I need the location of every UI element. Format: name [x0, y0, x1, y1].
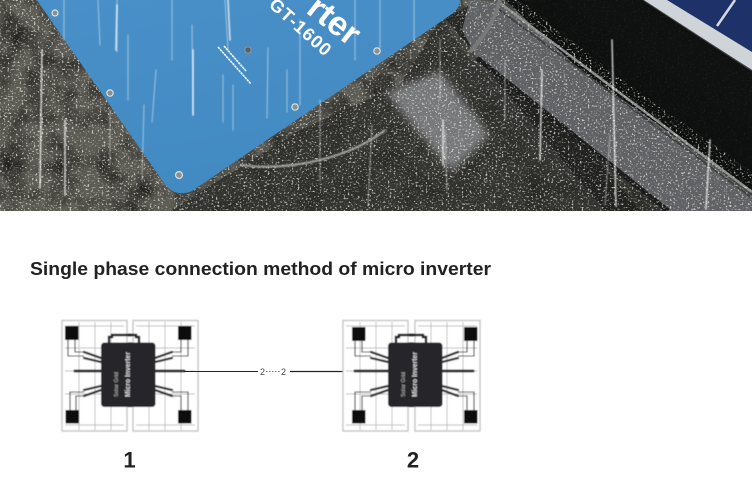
break label: 2 [260, 367, 265, 377]
diagram 1: inverter with two solar panels [62, 320, 198, 431]
cable [470, 0, 500, 52]
black recess [505, 0, 752, 190]
speckle [0, 0, 752, 211]
inverter body [388, 342, 442, 407]
ground base [0, 0, 752, 211]
connectors [355, 352, 473, 396]
panels frame [343, 320, 480, 431]
panels frame [62, 320, 198, 431]
junction boxes [65, 326, 192, 424]
connectors [75, 352, 184, 396]
title: Single phase connection method of micro inverter [30, 258, 491, 279]
inverter body [101, 342, 156, 407]
inverter sublabel: Solar Grid [114, 372, 120, 397]
photo: rain-soaked micro inverter on wet ground [0, 0, 752, 211]
water arc [240, 130, 385, 167]
cables [68, 340, 188, 410]
inverter sublabel: Solar Grid [401, 372, 407, 397]
panel cell grid [65, 322, 195, 430]
screws [52, 10, 380, 178]
number 2: 2 [407, 448, 419, 472]
dark gravel centre [170, 20, 680, 211]
panel cell grid [346, 322, 477, 430]
cables [355, 341, 474, 410]
recess speckle mask [520, 0, 752, 172]
junction boxes [352, 327, 478, 424]
number 1: 1 [123, 448, 136, 472]
diagram 2: inverter with two solar panels [343, 320, 480, 431]
wet concrete patch [385, 72, 490, 172]
inverter label: Micro Inverter [123, 352, 132, 397]
connection line with break mark [184, 367, 360, 377]
rain streaks [40, 0, 710, 209]
inverter label: Micro Inverter [410, 352, 419, 397]
inverter handle [109, 335, 139, 344]
solar panel corner [643, 0, 752, 70]
inverter blue casing [34, 0, 460, 193]
grey channel band [462, 0, 752, 211]
casing fine print [218, 46, 251, 84]
metal edge [500, 3, 752, 192]
connection line with break mark: 2 [281, 367, 286, 377]
inverter handle [396, 335, 426, 344]
dark rail band [445, 5, 640, 211]
